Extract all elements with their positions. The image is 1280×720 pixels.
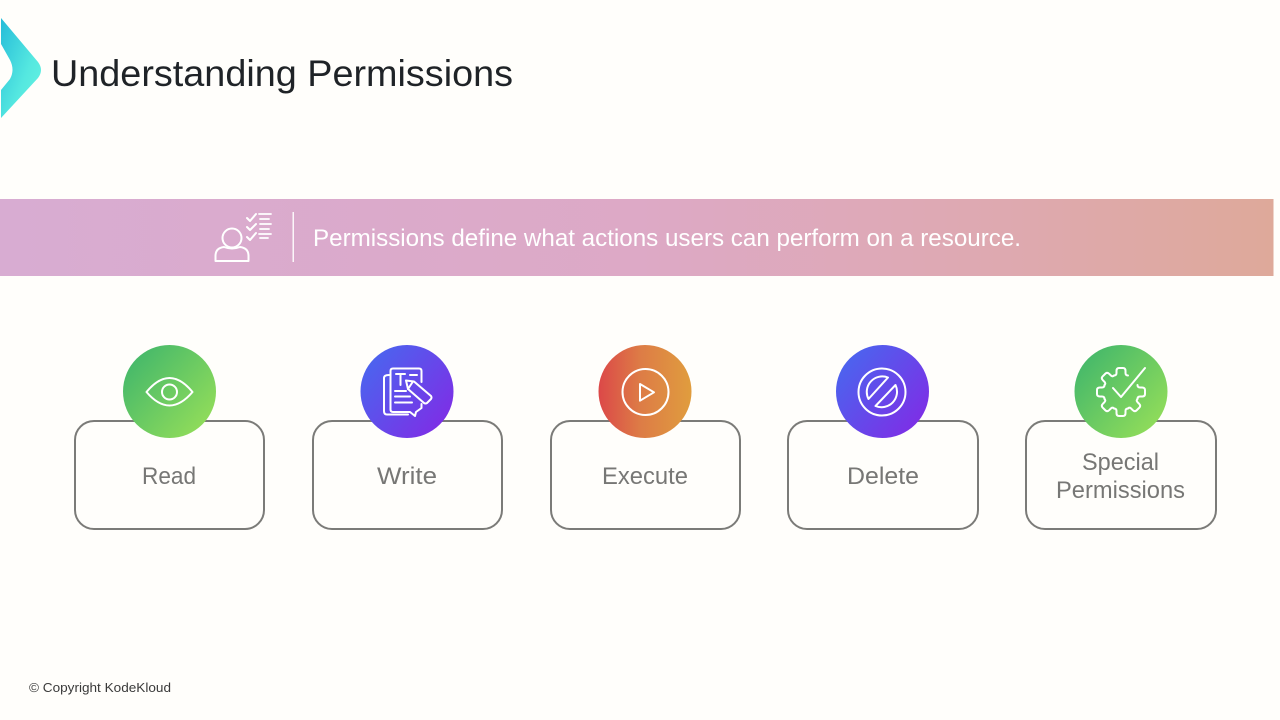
card: execute [551,421,740,529]
banner divider [292,212,294,262]
label: execute: Execute [602,463,688,490]
title: Understanding Permissions [51,53,513,94]
panel: execute [551,345,740,529]
panel: special permissions [1026,345,1216,529]
label: special permissions [1056,449,1185,504]
copyright footer: © Copyright KodeKloud [29,680,171,695]
label: special permissions: Special [1082,449,1159,476]
icon: prohibited [858,368,906,416]
circle: read [123,345,216,438]
label: write: Write [377,463,437,490]
panel: delete [788,345,978,529]
label: delete: Delete [847,463,919,490]
label: special permissions: Permissions [1056,477,1185,504]
card: special permissions [1026,421,1216,529]
circle: special permissions [1074,345,1168,438]
card: read [75,421,264,529]
banner [0,199,1274,276]
logo chevron [1,18,41,118]
card: write [313,421,502,529]
panel: read [75,345,264,529]
circle: write [360,345,454,438]
icon: eye [146,378,192,406]
card: delete [788,421,978,529]
panel: write [313,345,502,529]
label: read: Read [142,463,196,490]
circle: delete [836,345,929,438]
icon: gear with check [1097,368,1145,416]
icon: document and pencil [384,368,432,416]
icon: play [622,369,668,415]
circle: execute [598,345,692,438]
icon: user with checklist [216,214,271,261]
banner text: Permissions define what actions users can perform on a resource. [313,225,1021,252]
banner background [0,199,1274,276]
